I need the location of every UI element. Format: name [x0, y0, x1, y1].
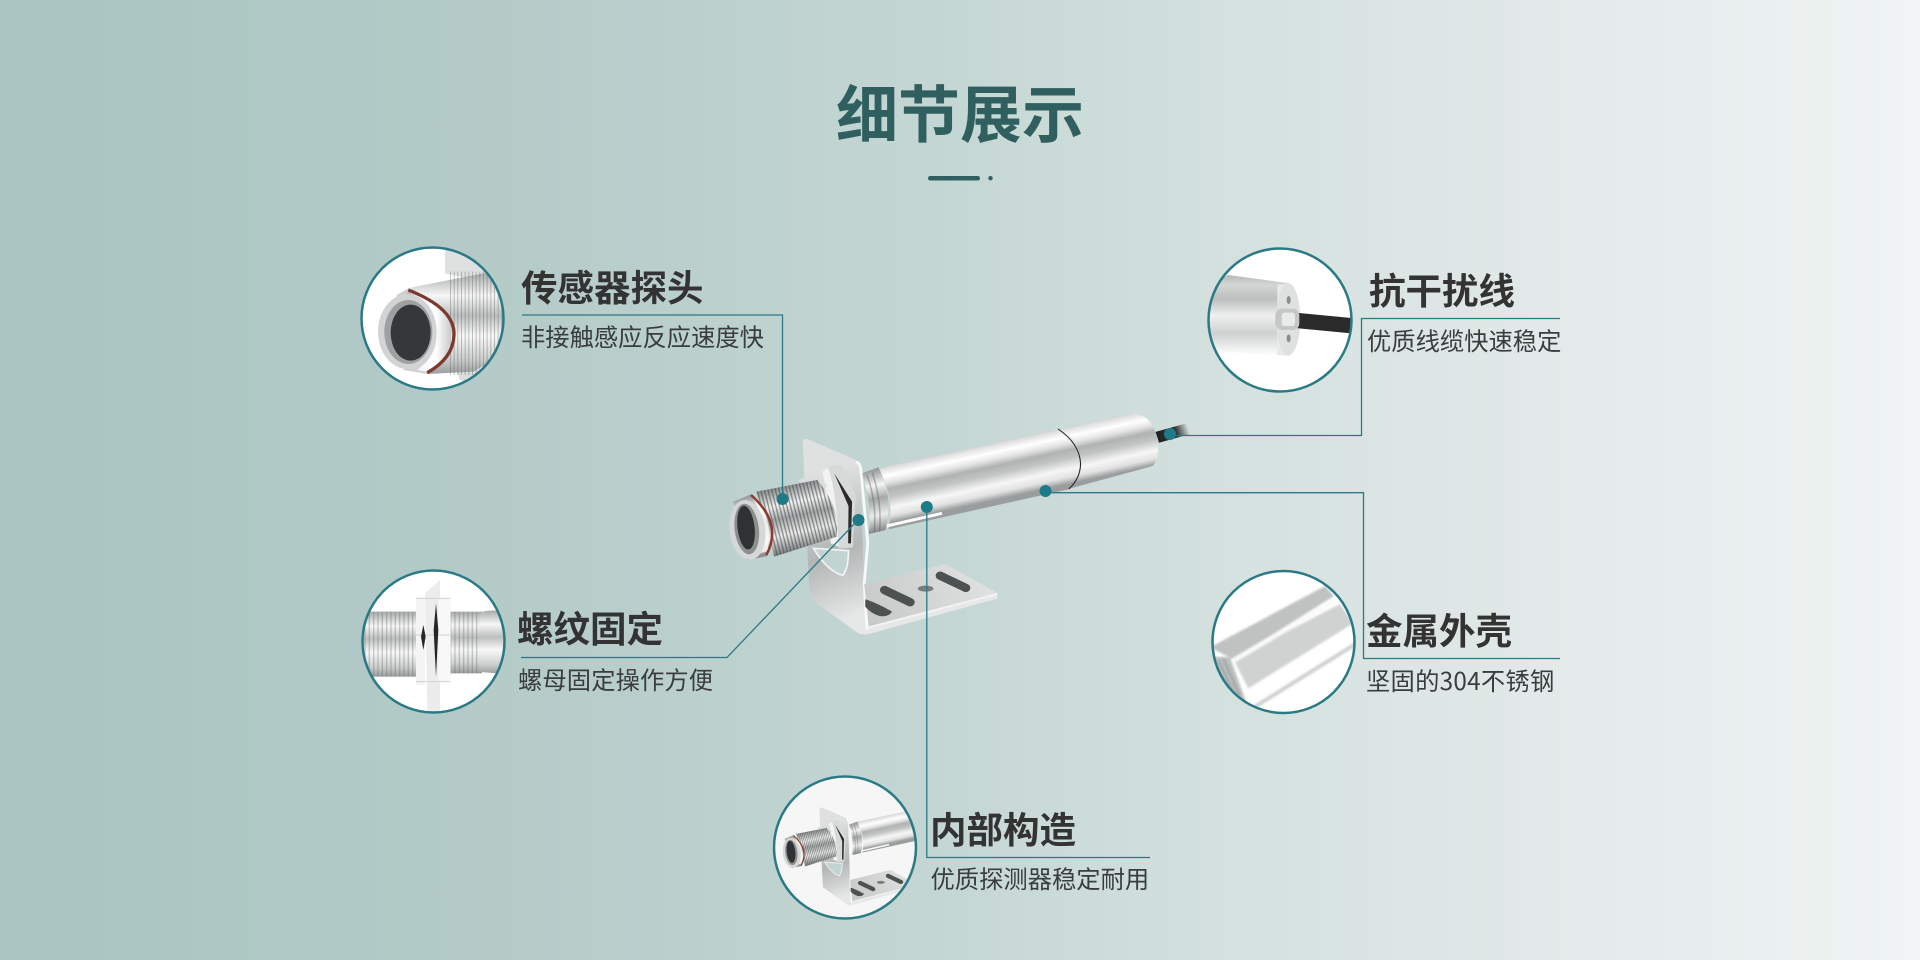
marker: [1164, 428, 1176, 440]
heading: 螺纹固定: [517, 600, 663, 653]
lens bezel: [726, 498, 769, 562]
description: 坚固的304不锈钢: [1366, 662, 1554, 697]
callout: 传感器探头: [362, 247, 788, 505]
thumbnail: thread nut: [360, 570, 507, 713]
callout: 抗干扰线: [1164, 248, 1561, 440]
marker: [921, 501, 933, 513]
leader line: [1172, 318, 1560, 436]
rear thread: [862, 467, 888, 534]
bracket hole: [814, 548, 848, 575]
callout: 内部构造: [774, 501, 1150, 918]
marker: [1040, 485, 1052, 497]
leader line: [522, 315, 782, 499]
description: 优质线缆快速稳定: [1367, 322, 1561, 357]
thumbnail: cable: [1207, 248, 1355, 392]
rear cap: [1058, 413, 1158, 488]
title: 细节展示: [836, 65, 1084, 155]
heading: 抗干扰线: [1369, 262, 1515, 315]
bracket: [803, 439, 997, 635]
title underline: [928, 176, 993, 180]
base slots: [865, 570, 972, 616]
product: infrared sensor with bracket: [726, 413, 1188, 635]
description: 螺母固定操作方便: [518, 661, 713, 696]
description: 非接触感应反应速度快: [521, 318, 764, 353]
front collar: [733, 494, 771, 560]
marker: [776, 493, 788, 505]
heading: 传感器探头: [521, 259, 704, 312]
leader line: [927, 507, 1150, 858]
cable: [1157, 429, 1188, 437]
leader line: [1046, 493, 1560, 658]
red O-ring: [751, 495, 772, 555]
hex nut: [822, 465, 856, 548]
thumbnail: sensor probe: [362, 247, 507, 390]
leader line: [521, 520, 858, 658]
thumbnail: metal shell: [1210, 571, 1357, 713]
front thread: [756, 480, 837, 557]
heading: 金属外壳: [1366, 602, 1512, 655]
callout: 金属外壳: [1040, 485, 1560, 713]
main tube: [878, 429, 1081, 529]
callout: 螺纹固定: [360, 514, 864, 713]
marker: [852, 514, 864, 526]
description: 优质探测器稳定耐用: [930, 860, 1149, 895]
thumbnail: internal structure: [772, 775, 918, 920]
heading: 内部构造: [930, 801, 1076, 854]
